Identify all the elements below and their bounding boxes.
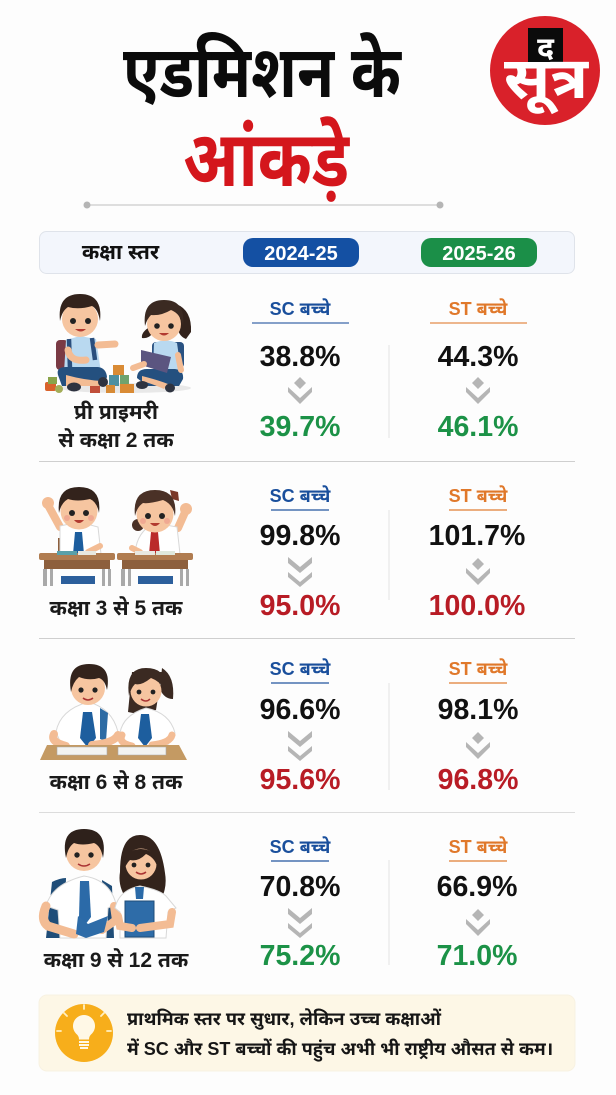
column: ST class 6-8 [438,659,518,796]
column: SC class 9-12: 70.8% [260,871,340,903]
column: ST class 9-12: ST बच्चे [449,837,508,857]
column: ST class 9-12: 66.9% [437,871,517,903]
panel: class 6 to 8 [40,659,518,796]
column: SC class 9-12 [260,837,340,972]
column: ST class 3-5 [429,486,525,622]
title [123,32,402,203]
column: ST pre-primary: 44.3% [438,341,518,373]
column: ST pre-primary [430,299,527,443]
logo: द सूत्र [490,16,600,125]
callout text: प्राथमिक स्तर पर सुधार, लेकिन उच्च कक्षाओं [127,1007,442,1031]
title: एडमिशन के [123,32,402,113]
column: ST class 3-5: 101.7% [429,520,525,552]
panel: pre-primary to class 2: प्री प्राइमरी [74,400,159,424]
illustration: children at desks raising hands [39,487,193,586]
column: SC class 3-5: SC बच्चे [270,486,331,506]
column: SC pre-primary [252,299,349,443]
panel: class 3 to 5: कक्षा 3 से 5 तक [50,596,183,620]
illustration: children reading at table [40,664,187,760]
table header bar [40,232,574,274]
column: SC pre-primary: 39.7% [260,411,340,443]
callout [39,995,575,1071]
callout text: में SC और ST बच्चों की पहुंच अभी भी राष्ट्रीय औसत से कम। [127,1037,553,1062]
illustration: older students with books [43,829,176,938]
table header bar: 2024-25 [264,243,338,265]
panel: class 9 to 12: कक्षा 9 से 12 तक [44,948,189,972]
title: आंकड़े [183,115,350,203]
column: ST class 6-8: ST बच्चे [449,659,508,679]
column: ST pre-primary: 46.1% [438,411,518,443]
column: SC class 9-12: 75.2% [260,940,340,972]
column: ST class 3-5: ST बच्चे [449,486,508,506]
column: SC class 6-8: 96.6% [260,694,340,726]
column: ST pre-primary: ST बच्चे [449,299,508,319]
column: ST class 6-8: 96.8% [438,764,518,796]
panel: pre-primary to class 2: से कक्षा 2 तक [58,428,174,452]
column: SC pre-primary: 38.8% [260,341,340,373]
icon: light bulb [55,1004,113,1062]
column: SC class 6-8 [260,659,340,796]
column: SC class 6-8: SC बच्चे [270,659,331,679]
table header bar: कक्षा स्तर [82,241,160,264]
column: SC class 3-5 [260,486,340,622]
column: SC class 3-5: 99.8% [260,520,340,552]
column: ST class 9-12: 71.0% [437,940,517,972]
callout text [127,1007,553,1062]
column: ST class 3-5: 100.0% [429,590,525,622]
column: SC class 9-12: SC बच्चे [270,837,331,857]
column: SC pre-primary: SC बच्चे [270,299,331,319]
column: SC class 3-5: 95.0% [260,590,340,622]
column: SC class 6-8: 95.6% [260,764,340,796]
logo: द सूत्र: सूत्र [504,46,589,115]
panel: class 3 to 5 [39,486,525,622]
column: ST class 9-12 [437,837,517,972]
logo: द सूत्र: द [537,32,555,65]
panel: class 6 to 8: कक्षा 6 से 8 तक [50,770,183,794]
table header bar: 2025-26 [442,243,516,265]
illustration: children playing with blocks [45,294,191,393]
panel: class 9 to 12 [43,829,517,972]
column: ST class 6-8: 98.1% [438,694,518,726]
panel: pre-primary to class 2 [45,294,527,452]
